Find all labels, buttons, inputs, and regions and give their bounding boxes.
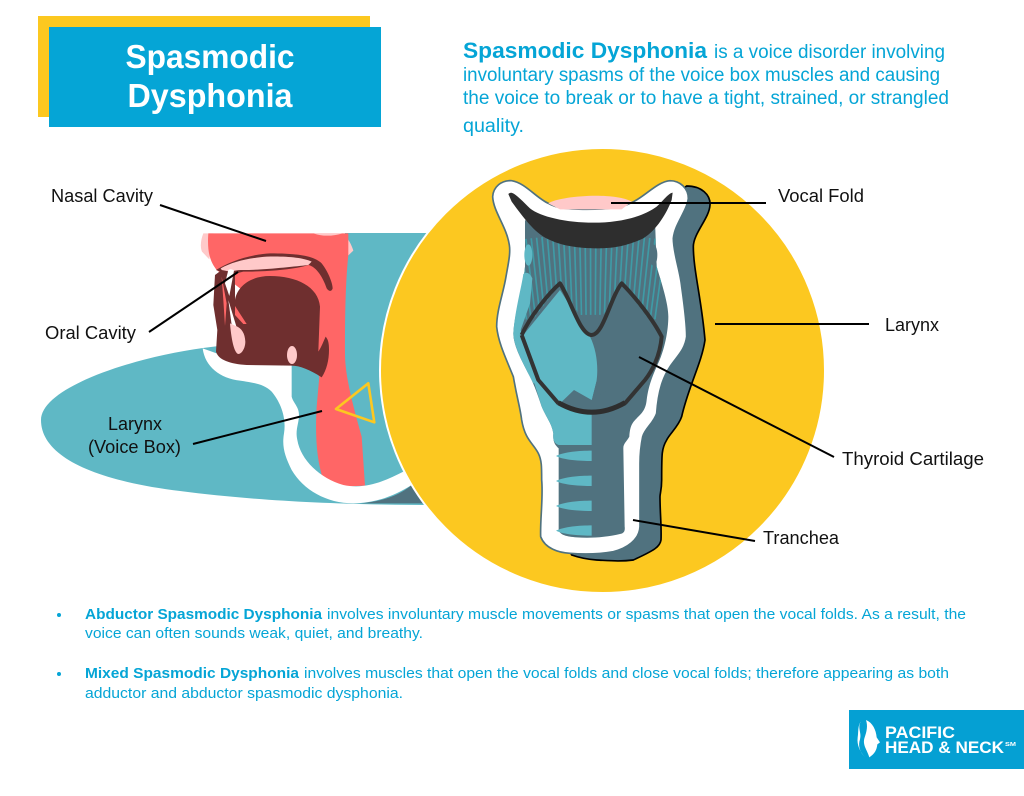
logo: HEAD & NECK bbox=[885, 739, 1004, 757]
label: Oral Cavity bbox=[45, 272, 238, 343]
larynx white outline bbox=[493, 181, 688, 554]
intro text block: the voice to break or to have a tight, strained, or strangled bbox=[463, 88, 949, 109]
larynx interior bbox=[513, 220, 668, 538]
label: Thyroid Cartilage bbox=[639, 357, 984, 469]
title panel: Spasmodic bbox=[126, 38, 294, 75]
label: Oral Cavity: Oral Cavity bbox=[45, 323, 136, 343]
thyroid light half bbox=[523, 290, 597, 400]
intro text block: involuntary spasms of the voice box muscles and causing bbox=[463, 65, 940, 86]
title panel: Dysphonia bbox=[128, 77, 293, 114]
label: Tranchea: Tranchea bbox=[763, 528, 840, 548]
label: Larynx (Voice Box): Larynx bbox=[108, 414, 162, 434]
title panel bbox=[38, 16, 381, 127]
bullet: mixed bbox=[57, 665, 949, 702]
larynx illustration bbox=[493, 181, 710, 561]
logo: PACIFIC bbox=[885, 724, 955, 742]
logo: SM bbox=[1005, 742, 1016, 748]
label: Larynx: Larynx bbox=[885, 315, 939, 335]
lower light trachea bbox=[533, 380, 597, 445]
head and throat illustration bbox=[41, 233, 440, 505]
bullet: abductor: voice can often sounds weak, quiet, and breathy. bbox=[85, 625, 423, 642]
yellow circle bbox=[380, 148, 825, 593]
bullet: mixed: Mixed Spasmodic Dysphonia bbox=[85, 665, 300, 682]
label: Nasal Cavity bbox=[51, 186, 266, 241]
intro text block: is a voice disorder involving bbox=[714, 42, 945, 63]
lower inner triangle bbox=[560, 390, 627, 413]
side ovals bbox=[513, 244, 657, 383]
logo bbox=[849, 710, 1024, 769]
bullet: abductor bbox=[57, 606, 966, 642]
lower cartilage arc bbox=[558, 403, 625, 412]
label: Nasal Cavity: Nasal Cavity bbox=[51, 186, 153, 206]
bullet: mixed: adductor and abductor spasmodic dysphonia. bbox=[85, 685, 403, 702]
label: Vocal Fold: Vocal Fold bbox=[778, 186, 864, 206]
label: Larynx (Voice Box) bbox=[88, 411, 322, 457]
intro text block: Spasmodic Dysphonia bbox=[463, 38, 708, 63]
vocal fold bbox=[548, 196, 632, 209]
muscle stripes bbox=[520, 275, 663, 280]
bullet: abductor: involves involuntary muscle movements or spasms that open the vocal folds. As a result, the bbox=[327, 606, 966, 623]
intro text block bbox=[463, 38, 949, 137]
label: Larynx (Voice Box): (Voice Box) bbox=[88, 437, 181, 457]
larynx shadow bbox=[547, 186, 710, 561]
thyroid outline bbox=[522, 283, 662, 403]
dark crescent bbox=[508, 193, 673, 248]
label: Thyroid Cartilage: Thyroid Cartilage bbox=[842, 449, 984, 469]
thyroid cartilage fill bbox=[522, 283, 662, 413]
bullet: mixed: involves muscles that open the vocal folds and close vocal folds; therefore appearing as both bbox=[304, 665, 949, 682]
bullet: abductor: Abductor Spasmodic Dysphonia bbox=[85, 606, 323, 623]
larynx triangle marker bbox=[336, 383, 374, 422]
label: Tranchea bbox=[633, 520, 840, 548]
icon: face profile bbox=[857, 720, 880, 757]
trachea rings bbox=[556, 451, 592, 536]
intro text block: quality. bbox=[463, 116, 524, 137]
